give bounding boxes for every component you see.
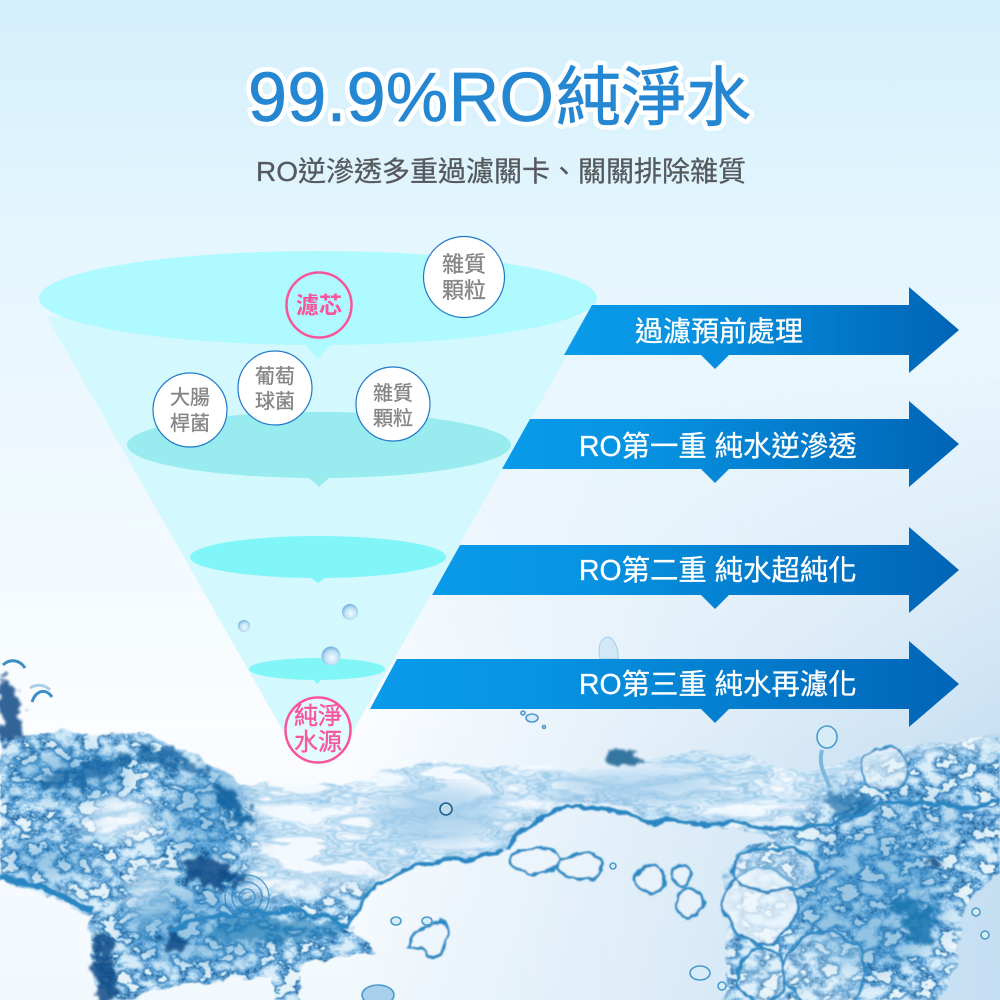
- water droplets in funnel: [238, 604, 358, 666]
- bubble: impurity particles top: [424, 236, 504, 318]
- left spray flecks: [3, 661, 52, 702]
- bubble: impurity particles middle: 顆粒: [373, 407, 413, 430]
- arrow: RO stage three: [370, 641, 959, 727]
- arrow: RO stage three: RO第三重 純水再濾化: [579, 669, 857, 701]
- bubble: filter core: 濾芯: [296, 292, 342, 318]
- ice-like bubbles: [405, 746, 909, 1000]
- panel: filtration funnel: [39, 251, 597, 738]
- bubble: staphylococcus: 球菌: [255, 390, 295, 413]
- title: 純淨水: [556, 61, 751, 134]
- bubble: pure water source: 水源: [294, 729, 342, 756]
- water ridge lines: [0, 800, 1000, 930]
- bubble: filter core: [286, 272, 352, 338]
- arrow: RO stage one: [502, 401, 959, 487]
- title: 純淨水: [556, 61, 751, 134]
- subtitle: RO逆滲透多重過濾關卡、關關排除雜質: [256, 156, 746, 187]
- bubble: impurity particles middle: [356, 367, 430, 441]
- bubble: pure water source: [286, 698, 350, 762]
- water splash photo: [0, 637, 1000, 1000]
- layer 1 disc: [39, 251, 597, 359]
- layer 2 disc: [127, 412, 511, 487]
- dark water patches: [0, 676, 942, 1000]
- title: 99.9%RO: [248, 58, 554, 136]
- arrow: RO stage one: RO第一重 純水逆滲透: [579, 431, 857, 463]
- arrow: pre-filtration: 過濾預前處理: [635, 316, 803, 347]
- ripple rings: [225, 875, 269, 919]
- layer 3 disc: [190, 536, 446, 583]
- bubble: staphylococcus: 葡萄: [255, 365, 295, 388]
- bubble: pure water source: 純淨: [294, 703, 342, 730]
- bubble: E. coli: 大腸: [170, 386, 210, 409]
- arrow: pre-filtration: [564, 287, 959, 373]
- water texture: [0, 700, 1000, 1000]
- bubble: E. coli: [153, 373, 227, 447]
- arrow: RO stage two: RO第二重 純水超純化: [579, 555, 857, 587]
- small droplets: [362, 637, 989, 1000]
- layer 4 disc: [249, 658, 385, 684]
- funnel body: [47, 317, 589, 738]
- title: [248, 58, 751, 136]
- title: 99.9%RO: [248, 58, 554, 136]
- bubble: staphylococcus: [238, 351, 312, 425]
- bubble: impurity particles top: 雜質: [442, 252, 486, 277]
- bubble: E. coli: 桿菌: [170, 412, 210, 435]
- bubble: impurity particles middle: 雜質: [373, 382, 413, 405]
- bubble: impurity particles top: 顆粒: [442, 278, 486, 303]
- arrow: RO stage two: [432, 527, 959, 613]
